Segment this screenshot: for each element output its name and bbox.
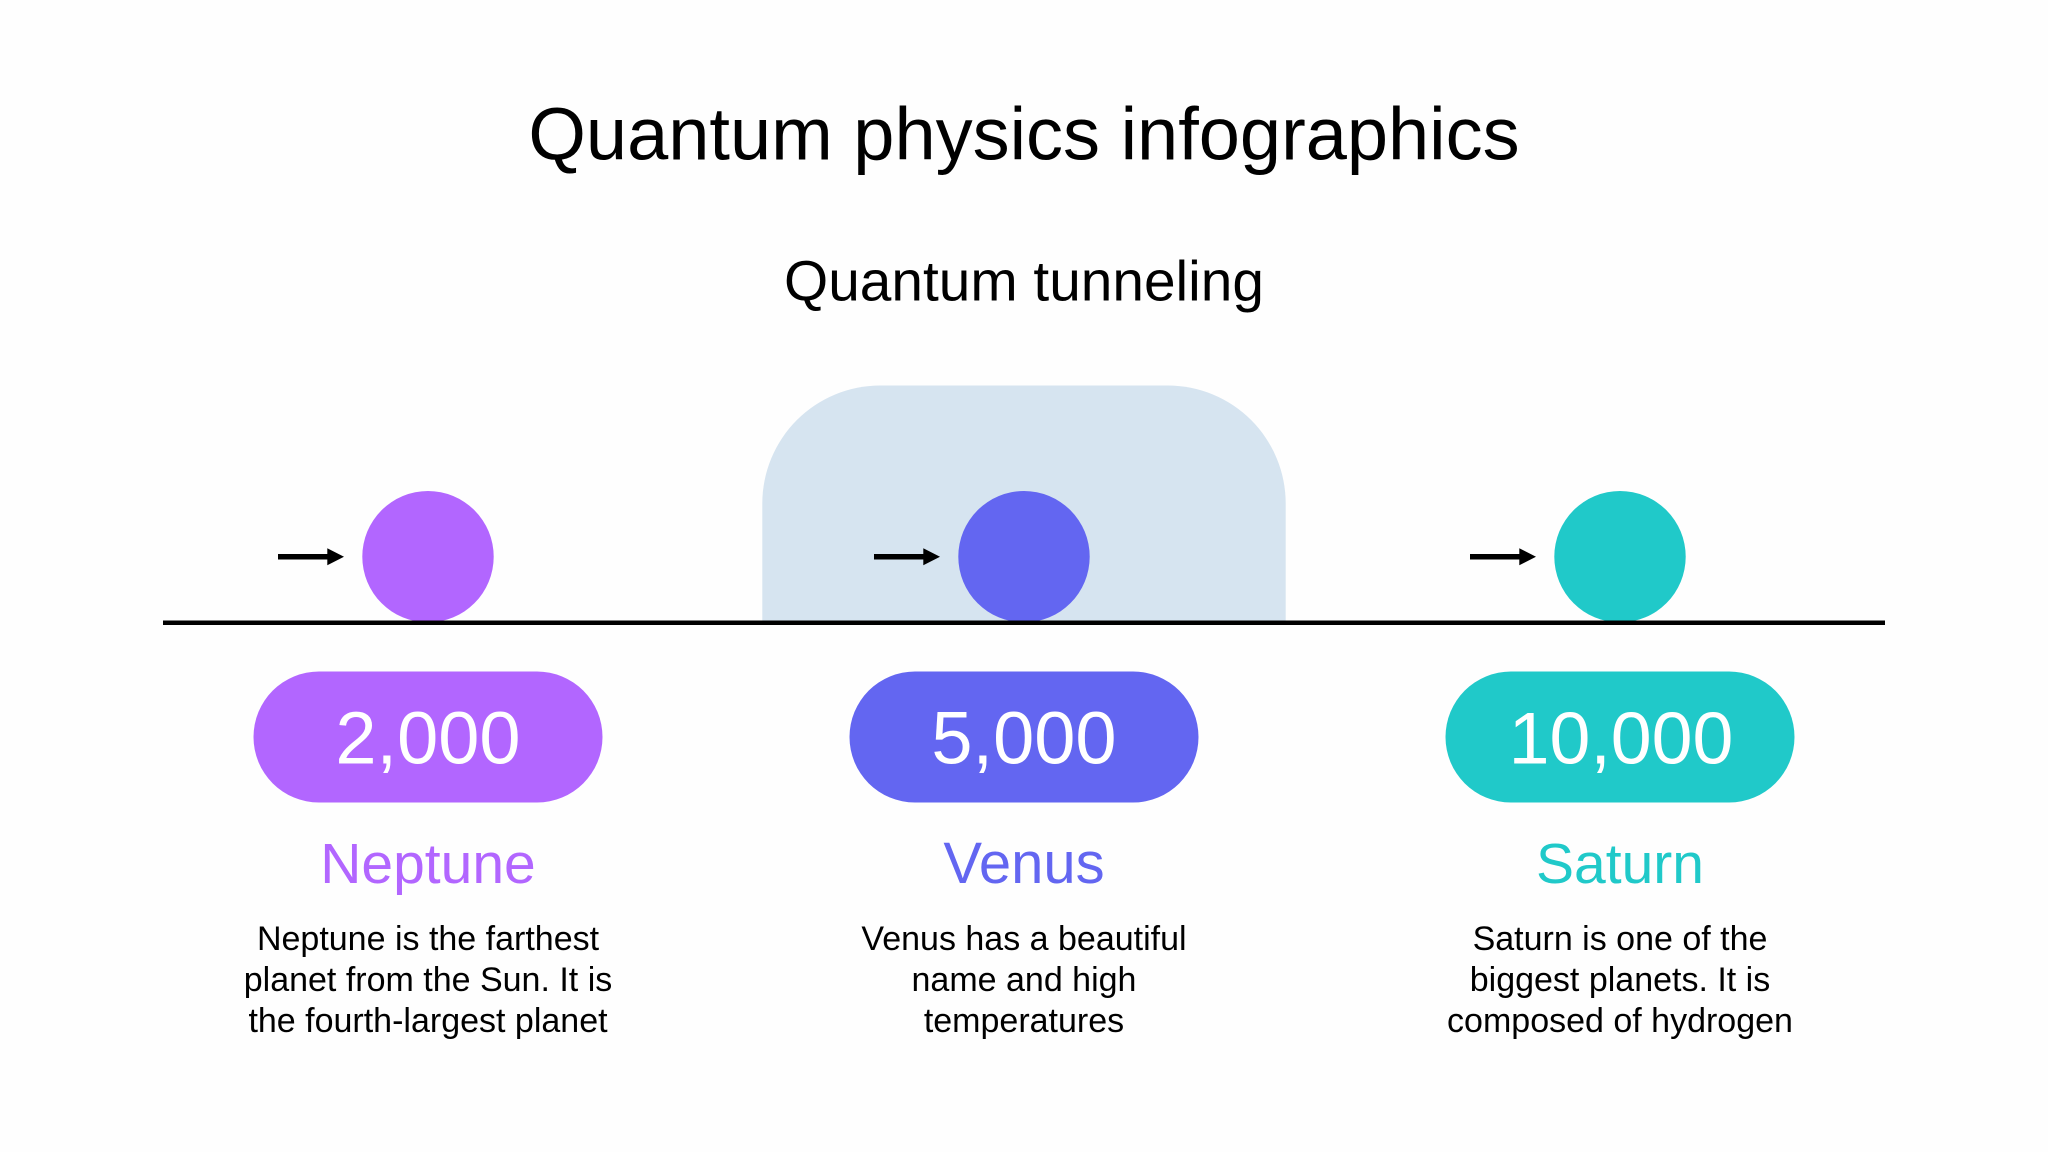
description: Neptune: Neptune is the farthest <box>257 920 600 958</box>
panel: Neptune <box>244 672 612 1040</box>
description: Saturn: Saturn is one of the <box>1473 920 1767 958</box>
description: Neptune: the fourth-largest planet <box>248 1002 608 1040</box>
subtitle: Quantum tunneling <box>784 250 1264 314</box>
ball: Neptune <box>362 491 494 622</box>
ball: Saturn <box>1554 491 1686 622</box>
arrow: Saturn <box>1470 548 1536 565</box>
name: Saturn: Saturn <box>1536 832 1704 896</box>
description: Venus: name and high <box>912 961 1136 999</box>
value pill: 2,000: 2,000 <box>335 696 521 780</box>
panel: Saturn <box>1446 672 1794 1040</box>
barrier <box>762 386 1286 622</box>
panel: Venus <box>850 672 1198 1040</box>
name: Venus: Venus <box>943 831 1105 896</box>
title: Quantum physics infographics <box>528 92 1520 176</box>
ball: Venus <box>958 491 1090 622</box>
arrow: Neptune <box>278 548 344 565</box>
value pill: 2,000 <box>254 672 602 802</box>
description: Venus: temperatures <box>924 1002 1124 1040</box>
description: Neptune: planet from the Sun. It is <box>244 961 612 999</box>
value pill: 5,000: 5,000 <box>931 696 1117 780</box>
description: Venus: Venus has a beautiful <box>861 920 1187 958</box>
name: Neptune: Neptune <box>320 832 536 896</box>
value pill: 10,000: 10,000 <box>1509 696 1733 780</box>
description: Saturn: biggest planets. It is <box>1470 961 1770 999</box>
value pill: 10,000 <box>1446 672 1794 802</box>
description: Saturn: composed of hydrogen <box>1447 1002 1793 1040</box>
arrow: Venus <box>874 548 940 565</box>
ground line <box>163 620 1885 625</box>
value pill: 5,000 <box>850 672 1198 802</box>
